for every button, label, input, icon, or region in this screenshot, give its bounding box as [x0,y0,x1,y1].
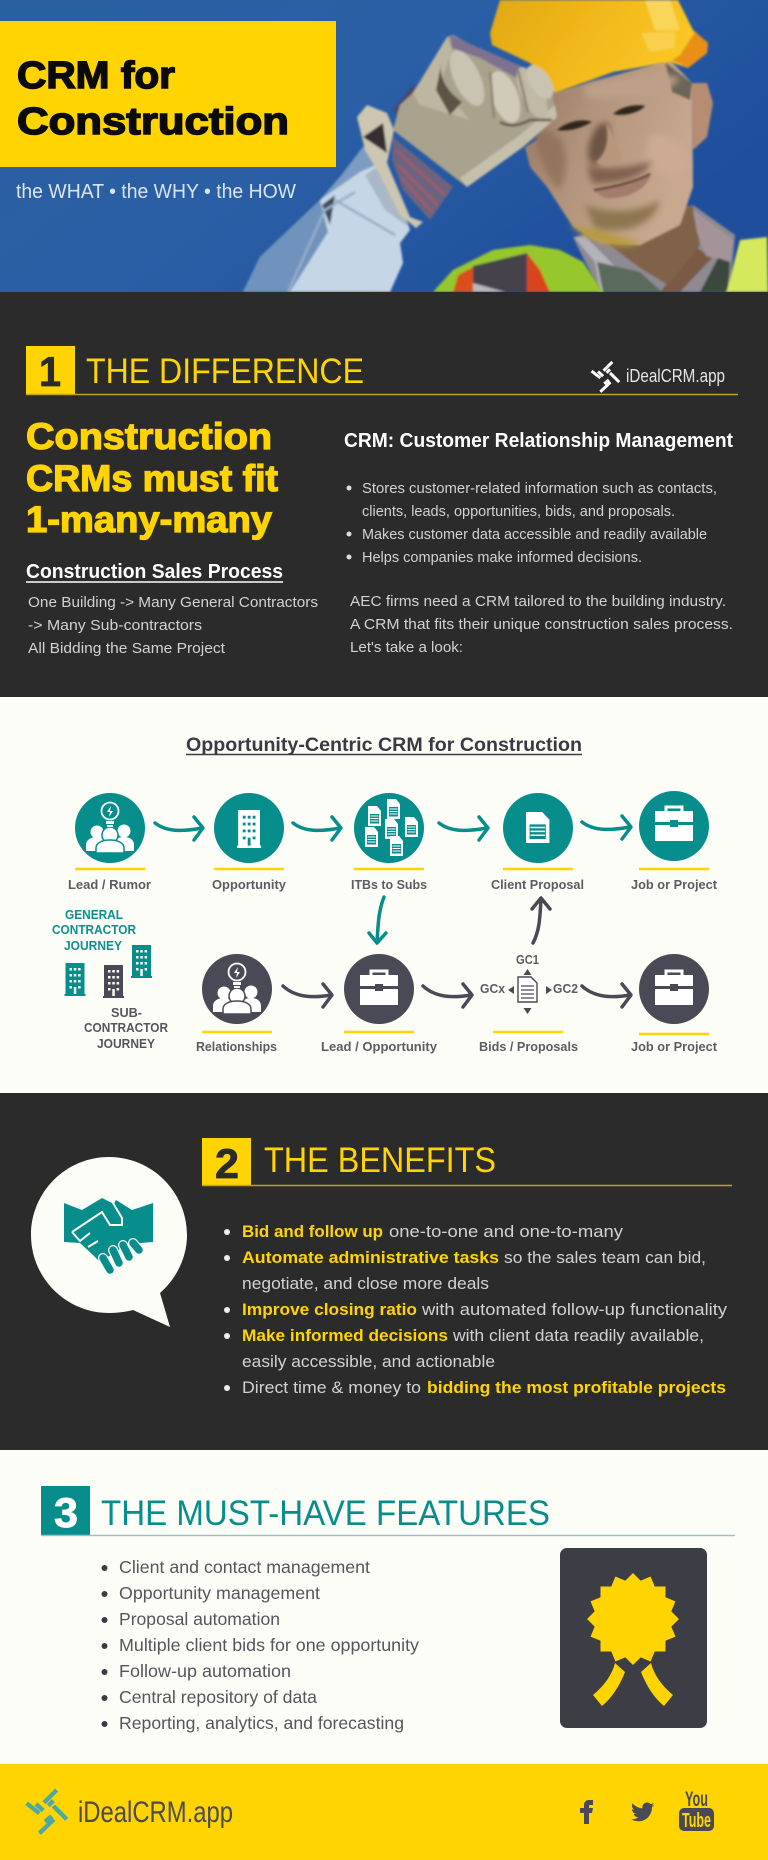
icon: youtube: Tube [682,1810,711,1832]
node: bids / proposals [479,952,578,1054]
text block: CRM definition: A CRM that fits their unique construction sales process. [350,616,733,633]
heading: section 2: 2 [215,1140,239,1187]
headline: 1-many-many [26,416,278,540]
footer [0,1764,768,1860]
list: benefits: with client data readily available, [452,1326,704,1345]
list: benefits: so the sales team can bid, [504,1248,706,1267]
denim sleeve [243,140,410,292]
list: benefits: negotiate, and close more deals [242,1274,489,1293]
node: lead / rumor: Lead / Rumor [68,877,151,892]
arrow [155,817,203,840]
glove palm and fingers [393,35,557,187]
text block: construction sales process: All Bidding the Same Project [28,640,226,657]
list: benefits: Automate administrative tasks [242,1248,499,1267]
heading: section 2 [202,1138,732,1187]
label: sub-contractor journey: JOURNEY [97,1037,156,1051]
arrow [423,984,472,1007]
text block: construction sales process [26,561,318,657]
list: features: Reporting, analytics, and forecasting [119,1713,404,1733]
label: sub-contractor journey: CONTRACTOR [84,1021,168,1035]
node: job or project (sub): Job or Project [631,1039,718,1054]
list: benefits: bidding the most profitable projects [427,1378,726,1397]
headline: 1-many-many: CRMs must fit [26,458,278,499]
heading: section 3 [41,1486,735,1536]
hero photo: worker in hard hat [0,0,768,292]
list: benefits: Bid and follow up [242,1222,383,1241]
safety vest [433,245,603,292]
node: bids / proposals: GCx [480,981,506,996]
heading: section 2: THE BENEFITS [264,1141,496,1180]
list: benefits: with automated follow-up functionality [421,1300,728,1319]
title block: CRM for [17,55,175,97]
icon: twitter [631,1802,654,1821]
list: features: Opportunity management [119,1583,320,1603]
logo: iDealCRM footer [27,1790,233,1833]
node: job or project (sub) [631,954,718,1054]
text block: CRM definition: Let's take a look: [350,639,463,656]
list: features: Follow-up automation [119,1661,291,1681]
text block: construction sales process: Construction Sales Process [26,561,283,583]
label: general contractor journey: GENERAL [65,908,123,922]
heading: section 1 [26,346,738,395]
label: general contractor journey: JOURNEY [64,939,123,953]
arrow: ITBs down to lead [369,897,386,943]
label: sub-contractor journey [84,1006,168,1051]
text block: CRM definition [344,430,733,656]
node: job or project [631,791,718,892]
text block: CRM definition: CRM: Customer Relationship Management [344,430,733,452]
node: relationships [196,954,277,1054]
arrow [439,817,488,840]
arrow [293,817,341,840]
node: lead / opportunity: Lead / Opportunity [321,1039,438,1054]
list: benefits: Make informed decisions [242,1326,448,1345]
text block: CRM definition: AEC firms need a CRM tailored to the building industry. [350,593,726,610]
node: relationships: Relationships [196,1039,277,1054]
logo: iDealCRM header: iDealCRM.app [626,366,725,386]
header panel [0,0,768,292]
node: bids / proposals: GC1 [516,952,539,967]
list: benefits: one-to-one and one-to-many [389,1222,624,1241]
node: bids / proposals: GC2 [553,981,578,996]
node: lead / opportunity [321,954,438,1054]
node: client proposal [491,793,584,892]
text block: construction sales process: One Building -> Many General Contractors [28,594,318,611]
heading: section 3: 3 [54,1489,78,1536]
arrow [283,984,332,1007]
text block: construction sales process: -> Many Sub-contractors [28,617,202,634]
headline: 1-many-many: 1-many-many [26,499,272,540]
list: features [102,1557,419,1733]
heading: section 3: THE MUST-HAVE FEATURES [101,1494,550,1533]
title block [0,21,336,167]
icon: facebook [580,1800,593,1824]
icon: buildings [64,945,152,998]
node: ITBs to subs [351,793,427,892]
logo: iDealCRM footer: iDealCRM.app [78,1796,233,1829]
arrow [582,816,631,839]
list: benefits: Direct time & money to [242,1378,421,1397]
icon: speech bubble with handshake [31,1157,187,1327]
text block: CRM definition: Stores customer-related information such as contacts, [362,480,717,497]
arrow: bids up to client proposal [532,898,550,943]
node: opportunity: Opportunity [212,877,287,892]
node: lead / rumor [68,793,151,892]
icon: youtube [679,1788,714,1832]
diagram title: Opportunity-Centric CRM for Construction [186,735,582,756]
panel: the benefits [0,1093,768,1450]
text block: CRM definition: Makes customer data accessible and readily available [362,526,707,543]
neck and collar [573,205,735,292]
list: benefits: easily accessible, and actionable [242,1352,495,1371]
panel: must-have features [0,1450,768,1764]
node: job or project: Job or Project [631,877,718,892]
title block: Construction [17,101,289,143]
list: features: Client and contact management [119,1557,370,1577]
text block: CRM definition: Helps companies make informed decisions. [362,549,642,566]
icon: youtube: You [685,1788,708,1811]
panel: opportunity-centric diagram [0,697,768,1093]
headline: 1-many-many: Construction [26,416,272,457]
arrow [582,984,631,1007]
text block: CRM definition: clients, leads, opportunities, bids, and proposals. [362,503,675,520]
glove cuff [357,105,423,228]
list: benefits: Improve closing ratio [242,1300,417,1319]
hard hat [490,0,708,93]
subtitle: the WHAT • the WHY • the HOW [16,181,296,203]
node: client proposal: Client Proposal [491,877,584,892]
face [692,83,713,150]
label: general contractor journey [52,908,136,953]
list: features: Multiple client bids for one opportunity [119,1635,419,1655]
logo: iDealCRM header [592,362,725,392]
label: sub-contractor journey: SUB- [111,1006,142,1020]
label: general contractor journey: CONTRACTOR [52,923,136,937]
node: ITBs to subs: ITBs to Subs [351,877,427,892]
heading: section 1: THE DIFFERENCE [86,352,364,391]
icon: award seal card [560,1548,707,1728]
node: bids / proposals: Bids / Proposals [479,1039,578,1054]
list: benefits [224,1222,728,1397]
list: features: Proposal automation [119,1609,280,1629]
heading: section 1: 1 [39,348,61,395]
panel: the difference [0,292,768,697]
node: opportunity [212,793,287,892]
list: features: Central repository of data [119,1687,317,1707]
